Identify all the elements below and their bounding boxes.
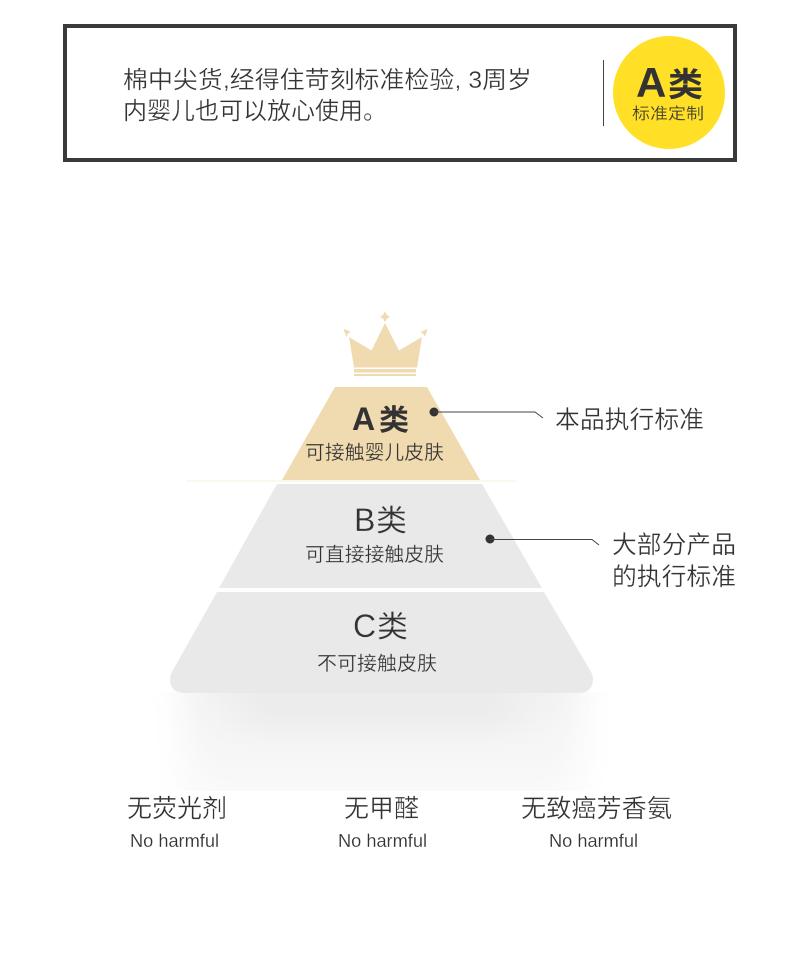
label: 无致癌芳香氨 xyxy=(521,795,672,851)
intro text xyxy=(123,67,532,125)
pyramid tier A xyxy=(186,387,516,481)
pyramid tier C: 不可接触皮肤 xyxy=(317,653,437,675)
label: 无甲醛: 无甲醛 xyxy=(344,795,419,823)
icon: crown xyxy=(344,312,428,376)
callout: 大部分产品的执行标准: 的执行标准 xyxy=(612,563,736,591)
badge: A类 标准定制 xyxy=(604,36,725,149)
callout: 本品执行标准 xyxy=(430,406,704,434)
pyramid tier B: B xyxy=(354,502,375,538)
pyramid tier A: 可接触婴儿皮肤 xyxy=(305,442,444,464)
intro text: 内婴儿也可以放心使用。 xyxy=(123,98,387,125)
label: 无致癌芳香氨: No harmful xyxy=(549,831,638,851)
intro text: 棉中尖货,经得住苛刻标准检验, 3周岁 xyxy=(123,67,532,94)
pyramid tier C xyxy=(170,592,593,693)
label: 无荧光剂 xyxy=(127,795,227,851)
callout: 本品执行标准: 本品执行标准 xyxy=(555,406,704,434)
badge: A类 标准定制: 类 xyxy=(668,66,703,103)
top callout panel xyxy=(65,26,735,160)
pyramid tier B: 可直接接触皮肤 xyxy=(305,544,444,566)
pyramid tier C: C xyxy=(353,608,376,644)
callout: 大部分产品的执行标准: 大部分产品 xyxy=(612,531,736,559)
pyramid tier A: 类 xyxy=(379,404,409,437)
label: 无致癌芳香氨: 无致癌芳香氨 xyxy=(521,795,672,823)
pyramid tier C: 类 xyxy=(377,611,408,644)
badge: A类 标准定制: A xyxy=(636,59,666,106)
label: 无荧光剂: 无荧光剂 xyxy=(127,795,227,823)
callout: 大部分产品的执行标准 xyxy=(486,531,736,591)
label: 无甲醛 xyxy=(338,795,427,851)
pyramid tier A: A xyxy=(352,401,375,437)
pyramid tier B: 类 xyxy=(376,505,407,538)
pyramid shadow xyxy=(190,693,576,760)
label: 无甲醛: No harmful xyxy=(338,831,427,851)
badge: A类 标准定制: 标准定制 xyxy=(632,105,704,123)
label: 无荧光剂: No harmful xyxy=(130,831,219,851)
pyramid tier B xyxy=(219,484,542,588)
